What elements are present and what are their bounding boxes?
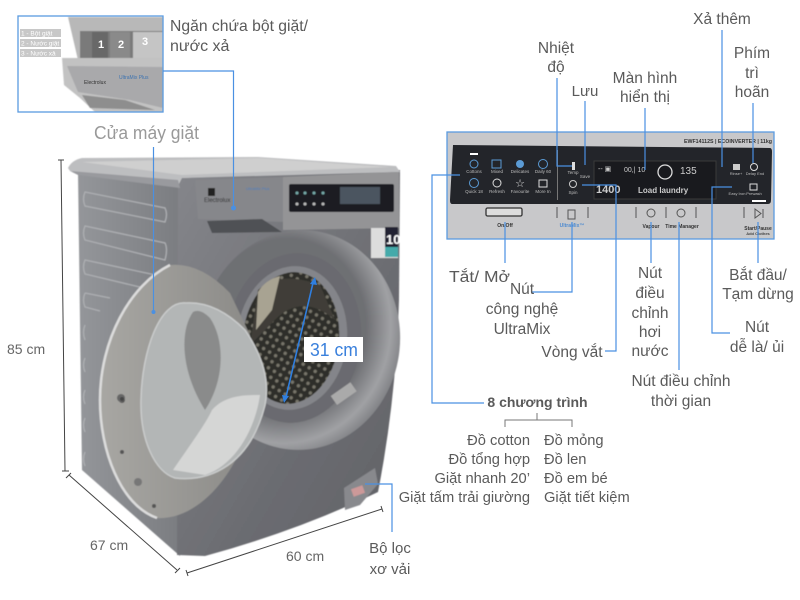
label: vapour: chỉnh	[631, 305, 669, 322]
on/off button	[486, 208, 522, 216]
label: ultramix: Nút	[510, 281, 535, 298]
programs list right: Đồ em bé	[544, 471, 608, 487]
program buttons: Refresh	[489, 189, 505, 194]
label: on off: Tắt/ Mở	[449, 269, 510, 286]
right buttons: Delay End	[746, 171, 764, 176]
dimension lines	[58, 160, 383, 576]
detergent drawer	[195, 177, 286, 222]
lint filter cover	[344, 468, 378, 510]
label: delay: hoãn	[735, 84, 769, 101]
LCD display: -- ▣	[598, 166, 611, 173]
program buttons: ☆	[515, 178, 525, 190]
programs heading: 8 chương trình	[487, 394, 588, 410]
label: vapour: Nút	[638, 265, 663, 282]
control panel photo	[447, 132, 774, 239]
LCD display: 00,| 10	[624, 167, 645, 174]
label: ultramix: UltraMix	[494, 321, 551, 338]
machine front	[177, 170, 400, 556]
program buttons: Mixed	[491, 169, 503, 174]
label: vapour: hơi	[639, 324, 661, 341]
label: spin: Vòng vắt	[541, 344, 603, 361]
label: detergent drawer: Ngăn chứa bột giặt/	[170, 18, 309, 35]
programs list left: Đồ cotton	[467, 433, 530, 449]
programs bracket	[505, 413, 572, 427]
inset: detergent drawer: 2	[118, 39, 124, 51]
label: time manager: Nút điều chỉnh	[631, 373, 731, 390]
drawer logo: Electrolux	[84, 80, 106, 86]
height dimension	[58, 160, 69, 471]
callout leader lines	[154, 30, 758, 532]
programs list right: Đồ mỏng	[544, 433, 604, 449]
programs list left: Giặt tấm trải giường	[399, 490, 530, 506]
right buttons: Easy Iron	[729, 191, 745, 196]
door glass bowl	[141, 303, 266, 479]
bottom labels: UltraMix™	[560, 223, 584, 229]
machine side panel	[78, 172, 180, 556]
control fascia	[283, 172, 399, 230]
label: delay: Phím	[734, 45, 770, 62]
right buttons	[729, 164, 766, 202]
LCD display: 1400	[596, 184, 620, 196]
programs list right: Đồ len	[544, 452, 586, 468]
drawer legend: 1 - Bột giặt	[21, 30, 53, 38]
label: ultramix: công nghệ	[486, 301, 558, 318]
drum	[236, 267, 346, 409]
label: lint filter: Bộ lọc	[369, 540, 411, 557]
drum diameter label	[304, 337, 363, 362]
label: height: 85 cm	[7, 341, 45, 357]
door seal surround	[189, 220, 411, 460]
door seal sticker	[331, 382, 357, 405]
label: detergent drawer: nước xả	[170, 38, 230, 55]
label: display: hiển thị	[620, 89, 670, 106]
inset: detergent drawer: UltraMix Plus	[119, 75, 149, 81]
drawer legend: 2 - Nước giặt	[21, 40, 59, 48]
LCD display: Load laundry	[638, 186, 689, 195]
drum diameter arrow	[282, 277, 317, 403]
label: save: Lưu	[572, 83, 598, 100]
bottom labels	[497, 223, 772, 236]
washing machine photo: 10	[386, 232, 400, 247]
program buttons: Cottons	[466, 169, 483, 174]
bottom labels: Start/Pause	[744, 226, 772, 232]
label: width: 60 cm	[286, 548, 324, 564]
label: delay: trì	[745, 65, 759, 82]
label: extra rinse: Xả thêm	[693, 11, 751, 28]
label: vapour: nước	[632, 343, 669, 360]
program buttons: Delicates	[511, 169, 530, 174]
drawer legend	[20, 29, 61, 58]
drawer numbers: 1	[98, 39, 104, 51]
program buttons: Favourite	[511, 189, 530, 194]
inset: detergent drawer: 3	[142, 36, 148, 48]
program buttons: Daily 60	[535, 169, 552, 174]
label: easy iron: dễ là/ ủi	[730, 339, 784, 356]
callout dots	[152, 206, 236, 314]
program buttons	[465, 153, 552, 194]
programs list left: Đồ tổng hợp	[448, 452, 530, 468]
temp save spin: Spin	[568, 190, 578, 195]
bottom labels: Add Clothes	[746, 231, 771, 236]
temp save spin: Save	[580, 174, 591, 179]
depth dimension	[66, 473, 180, 573]
right buttons: Rinse+	[730, 171, 743, 176]
machine top	[68, 157, 400, 186]
model text: EWF14112S | ECOINVERTER | 11kg	[684, 139, 772, 145]
washing machine photo: Electrolux	[204, 198, 230, 204]
programs list left: Giặt nhanh 20’	[434, 471, 530, 487]
temp save spin	[567, 162, 591, 195]
black control strip	[450, 145, 772, 204]
door hinge screws	[119, 397, 125, 403]
LCD display: 135	[680, 166, 697, 177]
label: display: Màn hình	[613, 70, 677, 87]
temp save spin: Temp	[567, 170, 579, 175]
inset: detergent drawer	[18, 16, 163, 112]
side louvers	[84, 192, 166, 466]
label: door: Cửa máy giặt	[94, 123, 199, 143]
label: start pause: Tạm dừng	[722, 286, 794, 303]
washing machine photo: UltraMix Plus	[246, 186, 270, 191]
door	[100, 265, 250, 518]
label: easy iron: Nút	[745, 319, 770, 336]
bottom labels: On/Off	[497, 223, 513, 229]
program buttons: More In	[535, 189, 551, 194]
drum diameter label: 31 cm	[310, 340, 358, 360]
washing machine photo	[68, 157, 411, 556]
program buttons: Quick 18	[465, 189, 483, 194]
energy label	[371, 228, 398, 258]
label: start pause: Bắt đầu/	[729, 267, 788, 284]
right buttons: Prewash	[746, 191, 762, 196]
programs list right: Giặt tiết kiệm	[544, 490, 630, 506]
label: temperature: Nhiệt	[538, 40, 575, 57]
bottom icons	[557, 207, 763, 219]
label: lint filter: xơ vải	[370, 561, 410, 578]
width dimension	[186, 506, 383, 576]
label: depth: 67 cm	[90, 537, 128, 553]
inset photo	[62, 17, 163, 112]
drawer legend: 3 - Nước xả	[21, 50, 56, 58]
label: vapour: điều	[635, 285, 665, 302]
LCD display	[594, 161, 716, 199]
bottom labels: Time Manager	[665, 224, 699, 230]
label: temperature: độ	[547, 59, 565, 76]
bottom labels: Vapour	[643, 224, 660, 230]
label: time manager: thời gian	[651, 393, 711, 410]
